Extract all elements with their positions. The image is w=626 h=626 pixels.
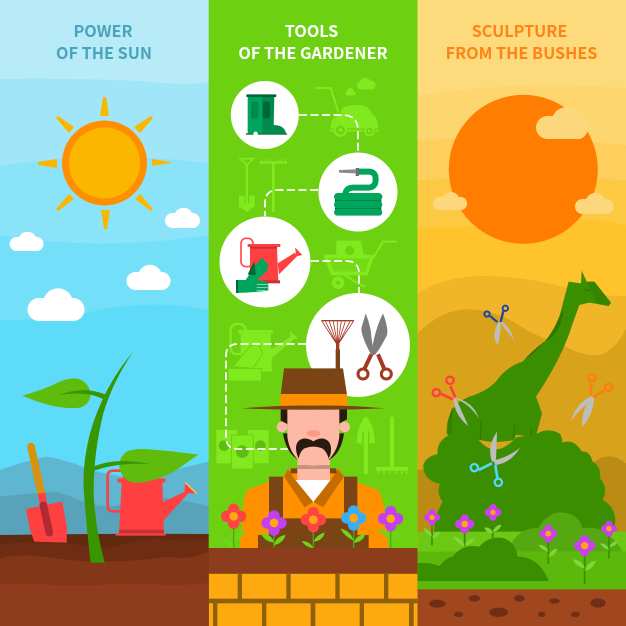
heading: sculpture from the bushes: FROM THE BUSHES bbox=[446, 40, 597, 64]
icon: watering can bbox=[108, 471, 197, 536]
panel: sculpture from the bushes bbox=[418, 0, 626, 626]
grass and ground bbox=[418, 512, 626, 626]
scissors: red bbox=[433, 377, 479, 426]
icon: shovel bbox=[26, 447, 67, 543]
white circles bbox=[220, 81, 410, 397]
head bbox=[277, 408, 350, 466]
hat bbox=[242, 368, 384, 410]
ghost: shovel and rake bbox=[239, 159, 287, 212]
bush bbox=[423, 430, 615, 533]
heading: tools of the gardener: OF THE GARDENER bbox=[238, 40, 388, 64]
flowers in planter bbox=[221, 504, 403, 548]
heading: power of the sun: POWER bbox=[73, 18, 133, 42]
flying scissors bbox=[433, 306, 612, 486]
heading: sculpture from the bushes: SCULPTURE bbox=[472, 18, 567, 42]
bush dinosaur topiary bbox=[418, 271, 626, 626]
icon: can and gloves bbox=[236, 238, 302, 293]
icon: rake and shears bbox=[321, 313, 391, 379]
clouds bbox=[9, 208, 200, 321]
ghost: wheelbarrow bbox=[324, 241, 397, 289]
flowers bbox=[423, 504, 618, 584]
heading: power of the sun: OF THE SUN bbox=[56, 40, 152, 64]
ghost: can and gloves bbox=[228, 324, 298, 381]
clouds bbox=[433, 107, 614, 214]
ghost icons lower bbox=[216, 324, 408, 474]
big orange sun bbox=[449, 95, 598, 244]
icon: seedling bbox=[22, 352, 198, 563]
ghost: trowel and rake bbox=[357, 416, 408, 474]
body bbox=[240, 460, 389, 548]
gardener figure bbox=[240, 368, 389, 548]
ghost icons upper bbox=[239, 78, 397, 289]
scissors: orange bbox=[571, 374, 612, 427]
panel: tools of the gardener bbox=[209, 0, 418, 626]
dinosaur bbox=[447, 271, 611, 442]
ghost: seed packets bbox=[216, 430, 269, 469]
panel: power of the sun bbox=[0, 0, 209, 626]
scissors: blue bbox=[484, 306, 514, 346]
hills bbox=[418, 276, 626, 533]
scissors: cyan bbox=[471, 432, 520, 486]
heading: tools of the gardener: TOOLS bbox=[285, 18, 338, 42]
ghost: lawn mower bbox=[315, 78, 379, 136]
icon: rubber boots bbox=[246, 94, 287, 136]
icon: garden hose bbox=[334, 168, 382, 216]
landscape and plant bbox=[0, 352, 209, 626]
dashed connectors bbox=[226, 115, 359, 449]
brick wall bbox=[209, 548, 418, 626]
icon: sun bbox=[38, 97, 171, 229]
